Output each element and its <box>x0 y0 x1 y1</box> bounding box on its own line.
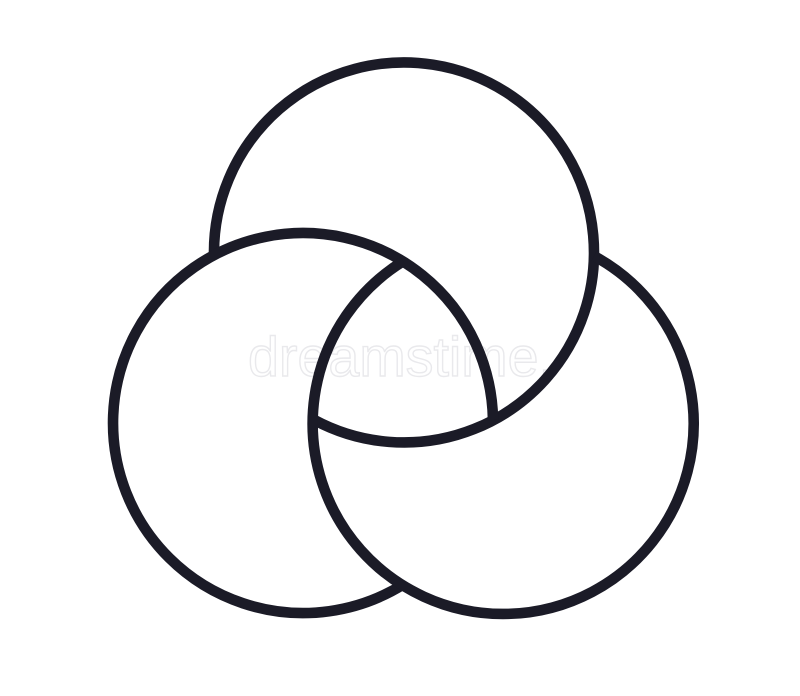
right ring arc <box>313 256 694 614</box>
top ring arc <box>214 62 594 442</box>
ring group <box>113 62 694 614</box>
watermark: dreamstime. <box>248 325 554 388</box>
left ring arc <box>113 233 493 613</box>
